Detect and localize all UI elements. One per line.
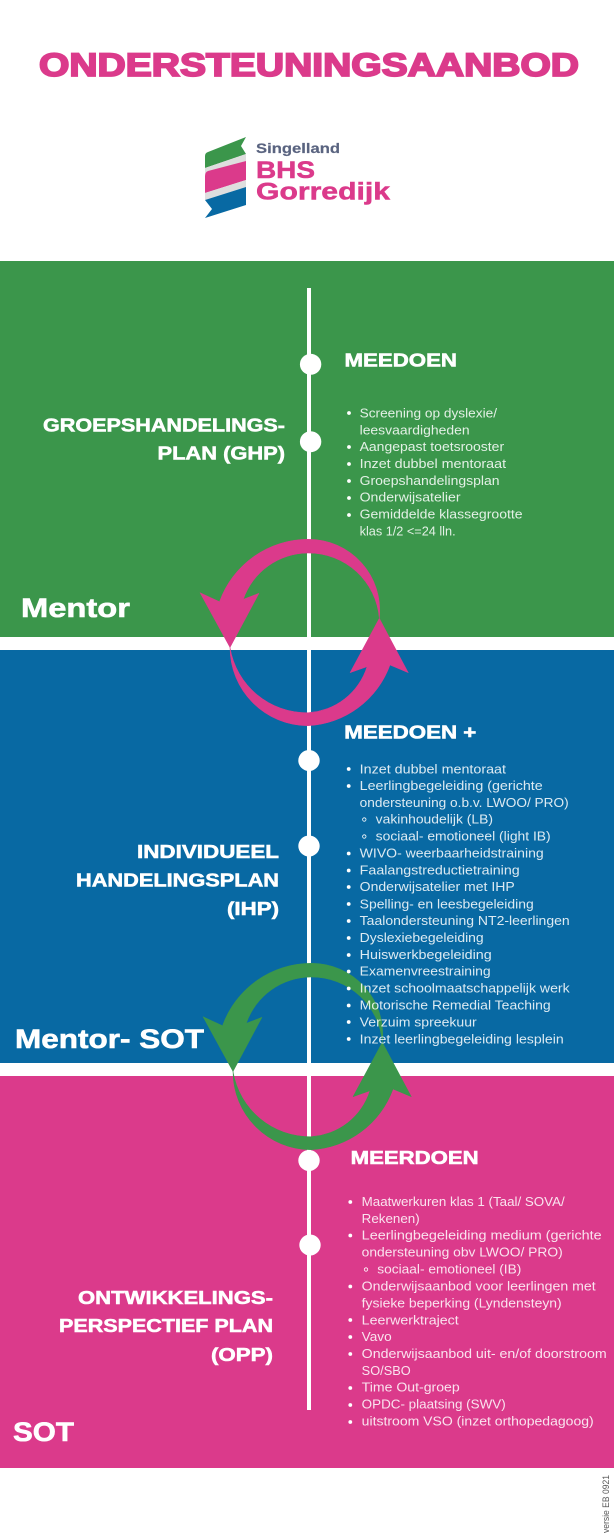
panel: blue band bbox=[0, 650, 614, 1063]
list: blue band: WIVO- weerbaarheidstraining bbox=[360, 847, 544, 861]
logo: Singelland BHS Gorredijk bbox=[205, 137, 391, 218]
list: blue band: Verzuim spreekuur bbox=[360, 1015, 477, 1029]
heading: MEEDOEN: MEEDOEN bbox=[344, 350, 457, 371]
list: green band: Aangepast toetsrooster bbox=[360, 440, 504, 454]
timeline line bbox=[307, 288, 311, 1410]
list: blue band: Spelling- en leesbegeleiding bbox=[360, 897, 534, 911]
list: green band: Inzet dubbel mentoraat bbox=[360, 457, 507, 471]
heading: GHP bbox=[43, 414, 285, 463]
list: green band: Groepshandelingsplan bbox=[360, 474, 500, 488]
list: blue band: Onderwijsatelier met IHP bbox=[360, 880, 515, 894]
list: green band: Screening op dyslexie/ bbox=[360, 406, 498, 420]
panel: green band bbox=[0, 261, 614, 637]
heading: MEERDOEN: MEERDOEN bbox=[351, 1147, 479, 1168]
list: pink band: Leerlingbegeleiding medium (gerichte bbox=[362, 1229, 602, 1243]
logo wordmark bbox=[256, 141, 391, 206]
list: blue band: Leerlingbegeleiding (gerichte bbox=[360, 779, 543, 793]
icon: ribbon logo bbox=[205, 137, 246, 218]
list: pink band: Leerwerktraject bbox=[362, 1313, 459, 1327]
heading: IHP bbox=[76, 841, 279, 919]
heading: OPP: PERSPECTIEF PLAN bbox=[59, 1315, 273, 1336]
arrow: green cycle bbox=[203, 963, 411, 1150]
list: pink band bbox=[348, 1195, 607, 1429]
panel: pink band bbox=[0, 1076, 614, 1468]
list: blue band: Inzet dubbel mentoraat bbox=[360, 762, 507, 776]
logo wordmark: Gorredijk bbox=[256, 178, 391, 206]
version note: versie EB 0921 bbox=[601, 1475, 611, 1533]
heading: OPP: ONTWIKKELINGS- bbox=[78, 1287, 273, 1308]
list: blue band: Dyslexiebegeleiding bbox=[360, 931, 484, 945]
label: Mentor- SOT: Mentor- SOT bbox=[15, 1024, 205, 1054]
list: pink band: Onderwijsaanbod voor leerlingen met bbox=[362, 1279, 596, 1293]
list: green band: Gemiddelde klassegrootte bbox=[360, 508, 523, 522]
list: pink band: Time Out-groep bbox=[362, 1381, 460, 1395]
list: pink band: Onderwijsaanbod uit- en/of doorstroom bbox=[362, 1347, 607, 1361]
logo wordmark: BHS bbox=[256, 157, 315, 184]
list: blue band: sociaal- emotioneel (light IB) bbox=[376, 830, 551, 844]
heading: IHP: HANDELINGSPLAN bbox=[76, 870, 279, 891]
label: Mentor: Mentor bbox=[21, 593, 131, 623]
list: blue band: Huiswerkbegeleiding bbox=[360, 948, 492, 962]
list: green band bbox=[347, 406, 523, 539]
list: pink band: fysieke beperking (Lyndensteyn) bbox=[362, 1296, 562, 1310]
list: green band: klas 1/2 <=24 lln. bbox=[360, 525, 456, 539]
list: pink band: OPDC- plaatsing (SWV) bbox=[362, 1398, 506, 1412]
heading: OPP bbox=[59, 1287, 273, 1365]
arrow: pink cycle bbox=[200, 539, 408, 726]
list: blue band: Inzet leerlingbegeleiding lesplein bbox=[360, 1032, 564, 1046]
list: blue band: ondersteuning o.b.v. LWOO/ PRO) bbox=[360, 796, 569, 810]
heading: IHP: (IHP) bbox=[227, 898, 279, 919]
timeline dots bbox=[298, 354, 321, 1256]
list: green band: Onderwijsatelier bbox=[360, 491, 461, 505]
label: SOT: SOT bbox=[13, 1417, 75, 1447]
list: pink band: Maatwerkuren klas 1 (Taal/ SOVA/ bbox=[362, 1195, 565, 1209]
heading: OPP: (OPP) bbox=[211, 1344, 273, 1365]
list: blue band: Examenvreestraining bbox=[360, 965, 491, 979]
list: blue band: Taalondersteuning NT2-leerlingen bbox=[360, 914, 570, 928]
list: blue band bbox=[347, 762, 570, 1046]
list: blue band: Inzet schoolmaatschappelijk werk bbox=[360, 982, 570, 996]
heading: GHP: PLAN (GHP) bbox=[158, 442, 285, 463]
list: blue band: vakinhoudelijk (LB) bbox=[376, 813, 493, 827]
list: pink band: Rekenen) bbox=[362, 1212, 420, 1226]
list: blue band: Motorische Remedial Teaching bbox=[360, 999, 551, 1013]
list: pink band: Vavo bbox=[362, 1330, 392, 1344]
list: pink band: uitstroom VSO (inzet orthopedagoog) bbox=[362, 1415, 594, 1429]
logo wordmark: Singelland bbox=[256, 141, 340, 157]
list: blue band: Faalangstreductietraining bbox=[360, 863, 520, 877]
heading: MEEDOEN +: MEEDOEN + bbox=[344, 721, 476, 742]
heading: GHP: GROEPSHANDELINGS- bbox=[43, 414, 285, 435]
list: pink band: SO/SBO bbox=[362, 1364, 411, 1378]
list: green band: leesvaardigheden bbox=[360, 423, 470, 437]
title: ONDERSTEUNINGSAANBOD bbox=[39, 47, 579, 83]
heading: IHP: INDIVIDUEEL bbox=[137, 841, 279, 862]
list: pink band: sociaal- emotioneel (IB) bbox=[377, 1263, 521, 1277]
list: pink band: ondersteuning obv LWOO/ PRO) bbox=[362, 1246, 563, 1260]
